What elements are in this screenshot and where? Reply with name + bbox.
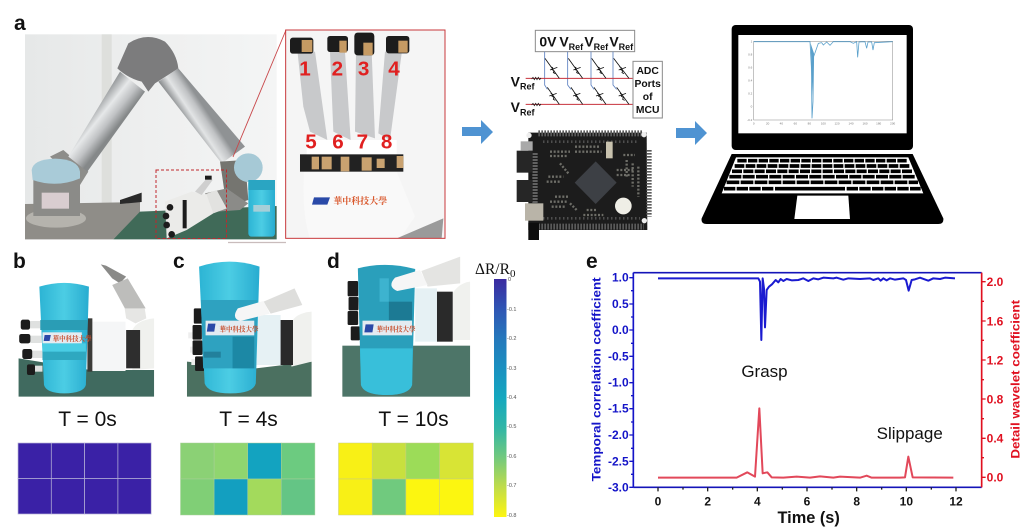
screen plot: -0.2	[747, 118, 753, 122]
x axis labels: 6	[804, 494, 811, 508]
screen plot: 20	[766, 122, 770, 126]
ADC box: MCU	[636, 105, 659, 116]
thumb	[421, 257, 460, 287]
sensor numbers: 6	[332, 130, 344, 153]
MCU board photo	[517, 132, 649, 240]
sensor numbers: 7	[357, 130, 368, 153]
panel label e: e	[586, 250, 598, 273]
colorbar: -0.4	[507, 395, 516, 401]
blue correlation line	[658, 278, 955, 340]
wrist	[220, 160, 248, 207]
colorbar: -0.6	[507, 454, 516, 460]
panel labels b c d: d	[327, 250, 340, 273]
row voltage labels: V	[511, 73, 520, 89]
screen plot: 120	[835, 122, 840, 126]
circuit diagram	[511, 30, 662, 118]
sensor matrix wiring	[526, 52, 633, 106]
screen plot: 0	[751, 105, 753, 109]
row voltage labels: Ref	[520, 82, 535, 92]
right axis labels: 0.8	[987, 392, 1004, 406]
row voltage labels: Ref	[520, 107, 535, 117]
colorbar title: ΔR/R	[475, 261, 510, 278]
photo c: cup and hand at T=4: 華中科技大學	[220, 323, 259, 334]
sensor numbers	[299, 57, 400, 153]
left axis labels: -1.0	[608, 376, 629, 390]
right axis labels	[987, 275, 1004, 485]
chart axes	[629, 273, 986, 491]
right axis title: Detail wavelet coefficient	[1008, 300, 1022, 459]
photo c: cup and hand at T=4	[187, 262, 312, 397]
left axis title: Temporal correlation coefficient	[589, 277, 603, 481]
left axis labels: -0.5	[608, 349, 629, 363]
left axis labels	[608, 271, 629, 494]
zoom line	[233, 30, 286, 157]
x axis labels: 2	[704, 494, 711, 508]
forearm of hand	[205, 188, 248, 212]
right axis labels: 0.0	[987, 471, 1004, 485]
photo b: cup and hand at T=0: 華中科技大學	[53, 333, 92, 343]
left axis labels: 1.0	[612, 271, 629, 285]
screen plot: 0.6	[748, 65, 753, 69]
x axis labels: 0	[655, 494, 662, 508]
elbow joint	[117, 37, 178, 92]
column voltage box: V	[609, 33, 619, 49]
x axis labels: 12	[949, 494, 963, 508]
sensor numbers: 2	[332, 57, 343, 80]
photo d: cup and hand at T=10: 華中科技大學	[376, 323, 416, 334]
trackpad	[794, 196, 850, 219]
university logo: 華中科技大學	[333, 194, 387, 207]
screen plot: 100	[821, 122, 826, 126]
sensor numbers: 1	[299, 57, 311, 80]
column voltage box: V	[584, 33, 594, 49]
heatmap b	[18, 443, 151, 514]
colorbar: -0.1	[507, 307, 516, 313]
x axis labels	[655, 494, 963, 508]
chart e: correlation and wavelet over time	[589, 271, 1022, 527]
knuckle gap	[307, 140, 397, 155]
screen plot	[747, 39, 895, 126]
left axis labels: -3.0	[608, 480, 629, 494]
ADC box: Ports	[634, 79, 661, 90]
x axis labels: 8	[853, 494, 860, 508]
time labels	[58, 408, 449, 431]
photo b: cup and hand at T=0	[19, 264, 154, 397]
ADC box: ADC	[636, 66, 659, 77]
screen plot: 200	[890, 122, 895, 126]
left axis labels: 0.0	[612, 323, 629, 337]
right axis labels: 1.6	[987, 314, 1004, 328]
column voltage box	[535, 30, 635, 52]
right axis labels: 2.0	[987, 275, 1004, 289]
slippage label: Slippage	[877, 424, 943, 443]
colorbar: 0	[508, 277, 511, 283]
thumb	[264, 288, 302, 314]
screen plot: 1	[751, 39, 753, 43]
panel a: inset sensor photo	[286, 30, 445, 238]
cup	[248, 180, 275, 237]
colorbar: -0.2	[507, 336, 516, 342]
right axis labels: 1.2	[987, 353, 1004, 367]
sensor numbers: 8	[381, 130, 392, 153]
grasp label: Grasp	[741, 362, 788, 381]
column voltage box: Ref	[594, 42, 609, 52]
panel labels b c d	[13, 250, 340, 273]
screen plot: 80	[808, 122, 811, 126]
panel labels b c d: b	[13, 250, 26, 273]
left axis labels: -2.5	[608, 454, 629, 468]
left axis labels: 0.5	[612, 297, 629, 311]
x axis labels: 10	[900, 494, 913, 508]
screen plot: 0.4	[748, 79, 753, 83]
heatmap c	[180, 443, 315, 515]
finger strips	[298, 52, 402, 140]
arrow 2	[676, 121, 707, 145]
finger tips	[290, 33, 409, 55]
screen plot: 0	[753, 122, 755, 126]
forearm	[158, 68, 245, 163]
x axis labels: 4	[754, 494, 761, 508]
colorbar: -0.3	[507, 366, 516, 372]
laptop screen bezel	[732, 25, 913, 150]
colorbar title: 0	[510, 268, 516, 280]
time labels: T = 4s	[219, 408, 278, 431]
time labels: T = 0s	[58, 408, 117, 431]
screen plot: 160	[863, 122, 868, 126]
sensor numbers: 5	[305, 130, 317, 153]
shoulder link	[50, 150, 88, 185]
colorbar: -0.5	[507, 424, 516, 430]
sensor numbers: 3	[358, 57, 369, 80]
row voltage labels	[511, 73, 535, 117]
screen plot: 180	[876, 122, 881, 126]
panel label a: a	[14, 12, 26, 35]
screen plot: 60	[794, 122, 797, 126]
column voltage box: 0V	[539, 33, 557, 49]
left axis labels: -1.5	[608, 402, 629, 416]
keyboard	[722, 157, 923, 193]
sensor numbers: 4	[388, 57, 400, 80]
arrow 1	[462, 120, 493, 144]
time labels: T = 10s	[378, 408, 449, 431]
sensor band	[300, 154, 403, 172]
ADC box: of	[643, 92, 653, 103]
left axis labels: -2.0	[608, 428, 629, 442]
screen plot: 40	[780, 122, 783, 126]
screen plot: 140	[849, 122, 854, 126]
glove	[303, 172, 415, 238]
screen plot: 0.2	[748, 92, 753, 96]
x axis title: Time (s)	[778, 509, 840, 527]
right axis labels: 0.4	[987, 432, 1004, 446]
panel labels b c d: c	[173, 250, 185, 273]
column voltage box: Ref	[569, 42, 584, 52]
grey underline	[228, 242, 286, 244]
screen plot: 0.8	[748, 52, 753, 56]
photo d: cup and hand at T=10	[342, 257, 470, 397]
colorbar	[494, 277, 516, 519]
column voltage box: Ref	[619, 42, 634, 52]
panel a: robot arm photo	[25, 34, 277, 239]
laptop icon	[702, 25, 943, 224]
red dashed region	[156, 170, 226, 238]
upper arm	[68, 72, 145, 172]
ADC box	[633, 61, 662, 118]
row voltage labels: V	[511, 99, 520, 115]
colorbar: -0.8	[507, 513, 516, 519]
colorbar: -0.7	[507, 483, 516, 489]
base	[33, 180, 80, 216]
column voltage box: V	[559, 33, 569, 49]
hand	[165, 192, 213, 238]
heatmap d	[338, 443, 473, 515]
laptop base	[702, 154, 943, 224]
red wavelet line	[658, 408, 953, 478]
